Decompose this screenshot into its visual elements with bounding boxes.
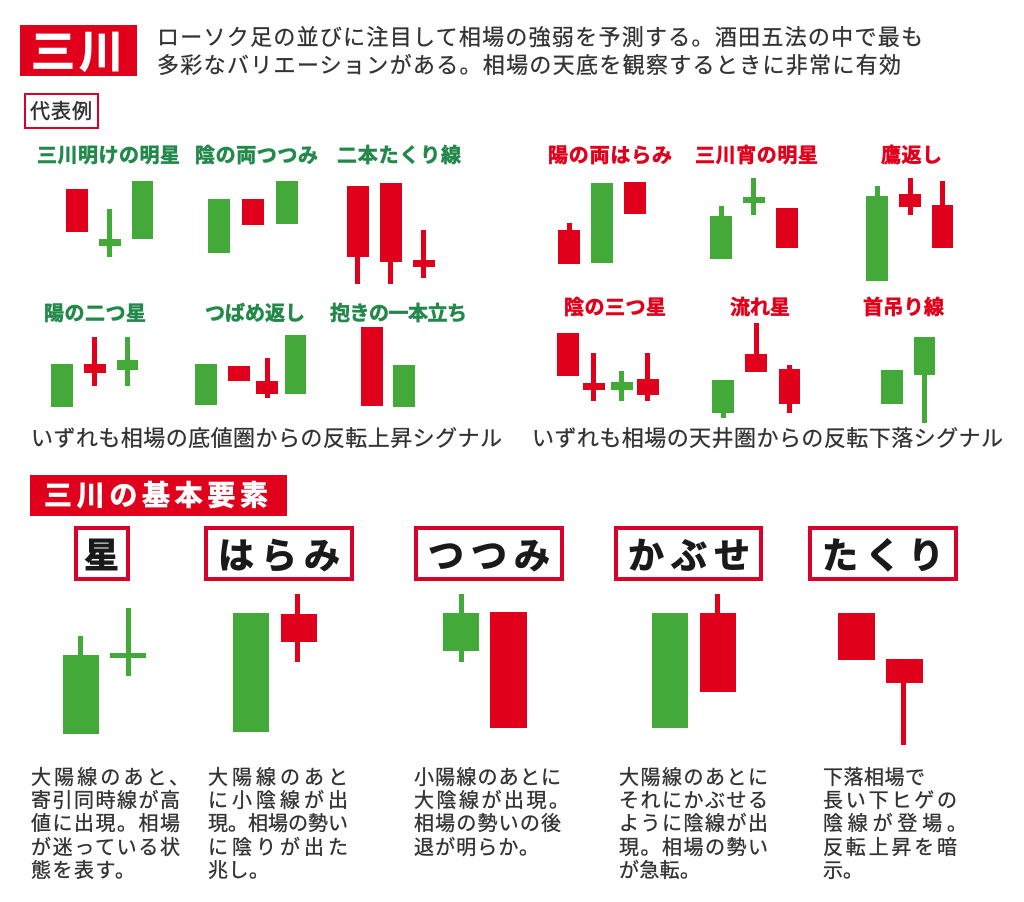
pattern: 三川宵の明星: 三川宵の明星 [695,144,818,167]
section heading: 三川の基本要素: 三川の基本要素 [44,480,268,511]
description: つつみ: 相場の勢いの後 [414,812,561,835]
description: 星: 態を表す。 [31,859,135,882]
description: たくり: 長い下ヒゲの [823,789,957,812]
title box: 星: 星 [84,537,119,576]
description: かぶせ [619,766,768,882]
element: はらみ [206,528,352,882]
description: かぶせ: 現。相場の勢い [619,836,768,859]
description: 星: 値に出現。相場 [31,812,180,835]
pattern: 三川宵の明星 [695,144,818,259]
title box: かぶせ: かぶせ [628,535,750,576]
pattern: 陰の三つ星: 陰の三つ星 [564,296,666,319]
label: 代表例 [25,94,98,128]
title box: かぶせ [616,528,761,579]
pattern: 抱きの一本立ち: 抱きの一本立ち [330,302,467,325]
description: たくり [823,766,967,882]
description: かぶせ: ように陰線が出 [619,812,768,835]
caption: bottom reversal signal: いずれも相場の底値圏からの反転上昇シグナル [31,426,502,451]
chart: かぶせ [652,594,736,728]
pattern: 陰の両つつみ [195,144,318,253]
description: かぶせ: 大陽線のあとに [619,766,768,789]
description: つつみ: 退が明らか。 [414,836,539,859]
description: 星: 寄引同時線が高 [31,789,180,812]
description: たくり: 示。 [823,860,863,882]
description: 星 [31,766,189,882]
pattern: 陰の三つ星 [557,296,666,401]
description: たくり: 下落相場で [823,766,925,789]
element: かぶせ [616,528,768,882]
title box: たくり: たくり [822,535,944,576]
intro text: 多彩なバリエーションがある。相場の天底を観察するときに非常に有効 [157,53,901,78]
pattern: つばめ返し: つばめ返し [205,302,305,325]
chart: たくり [838,613,923,745]
description: はらみ: に小陰線が出 [208,789,348,812]
pattern: 三川明けの明星: 三川明けの明星 [37,145,180,167]
description: はらみ: 大陽線のあと [208,766,348,789]
pattern: 陽の両はらみ [548,144,672,264]
pattern: 三川明けの明星 [37,145,180,257]
caption: top reversal signal: いずれも相場の天井圏からの反転下落シグナル [532,426,1003,451]
pattern: 流れ星: 流れ星 [730,296,790,319]
section heading: 三川の基本要素 [30,475,287,516]
description: つつみ: 小陽線のあとに [414,766,561,789]
title box: はらみ: はらみ [218,535,340,576]
element: 星 [31,528,189,882]
title box: たくり [810,528,956,579]
pattern: 二本たくり線: 二本たくり線 [337,144,461,167]
description: つつみ [414,766,569,859]
title box: はらみ [206,528,352,579]
description: はらみ: 現。相場の勢い [208,812,348,835]
pattern: つばめ返し [195,302,306,405]
description: たくり: 陰線が登場。 [823,812,967,835]
pattern: 鷹返し: 鷹返し [881,144,942,167]
pattern: 抱きの一本立ち [330,302,467,407]
title box: つつみ [416,528,562,579]
pattern: 鷹返し [866,144,953,281]
description: はらみ: 兆し。 [208,859,269,882]
description: はらみ: に陰りが出た [208,836,348,859]
intro text [157,25,923,78]
pattern: 陽の両はらみ: 陽の両はらみ [548,144,672,167]
title box: つつみ: つつみ [428,535,550,576]
description: はらみ [208,766,348,882]
element: たくり [810,528,967,882]
chart: 星 [63,608,146,734]
pattern: 流れ星 [712,296,800,418]
description: 星: が迷っている状 [31,836,180,859]
title box: 星 [76,528,128,579]
description: かぶせ: が急転。 [619,859,700,882]
description: 星: 大陽線のあと、 [31,766,189,789]
chart: はらみ [233,594,317,732]
pattern: 陰の両つつみ: 陰の両つつみ [195,144,318,167]
description: たくり: 反転上昇を暗 [823,836,957,859]
pattern: 陽の二つ星 [44,302,146,407]
pattern: 二本たくり線 [337,144,461,284]
intro text: ローソク足の並びに注目して相場の強弱を予測する。酒田五法の中で最も [157,25,923,50]
chart: つつみ [443,594,527,728]
description: つつみ: 大陰線が出現。 [414,789,569,812]
element: つつみ [414,528,569,859]
header badge: 三川: 三川 [31,28,123,77]
label: 代表例: 代表例 [30,100,92,123]
pattern: 首吊り線: 首吊り線 [863,296,944,319]
pattern: 首吊り線 [863,296,944,423]
pattern: 陽の二つ星: 陽の二つ星 [44,302,146,325]
description: かぶせ: それにかぶせる [619,790,768,812]
